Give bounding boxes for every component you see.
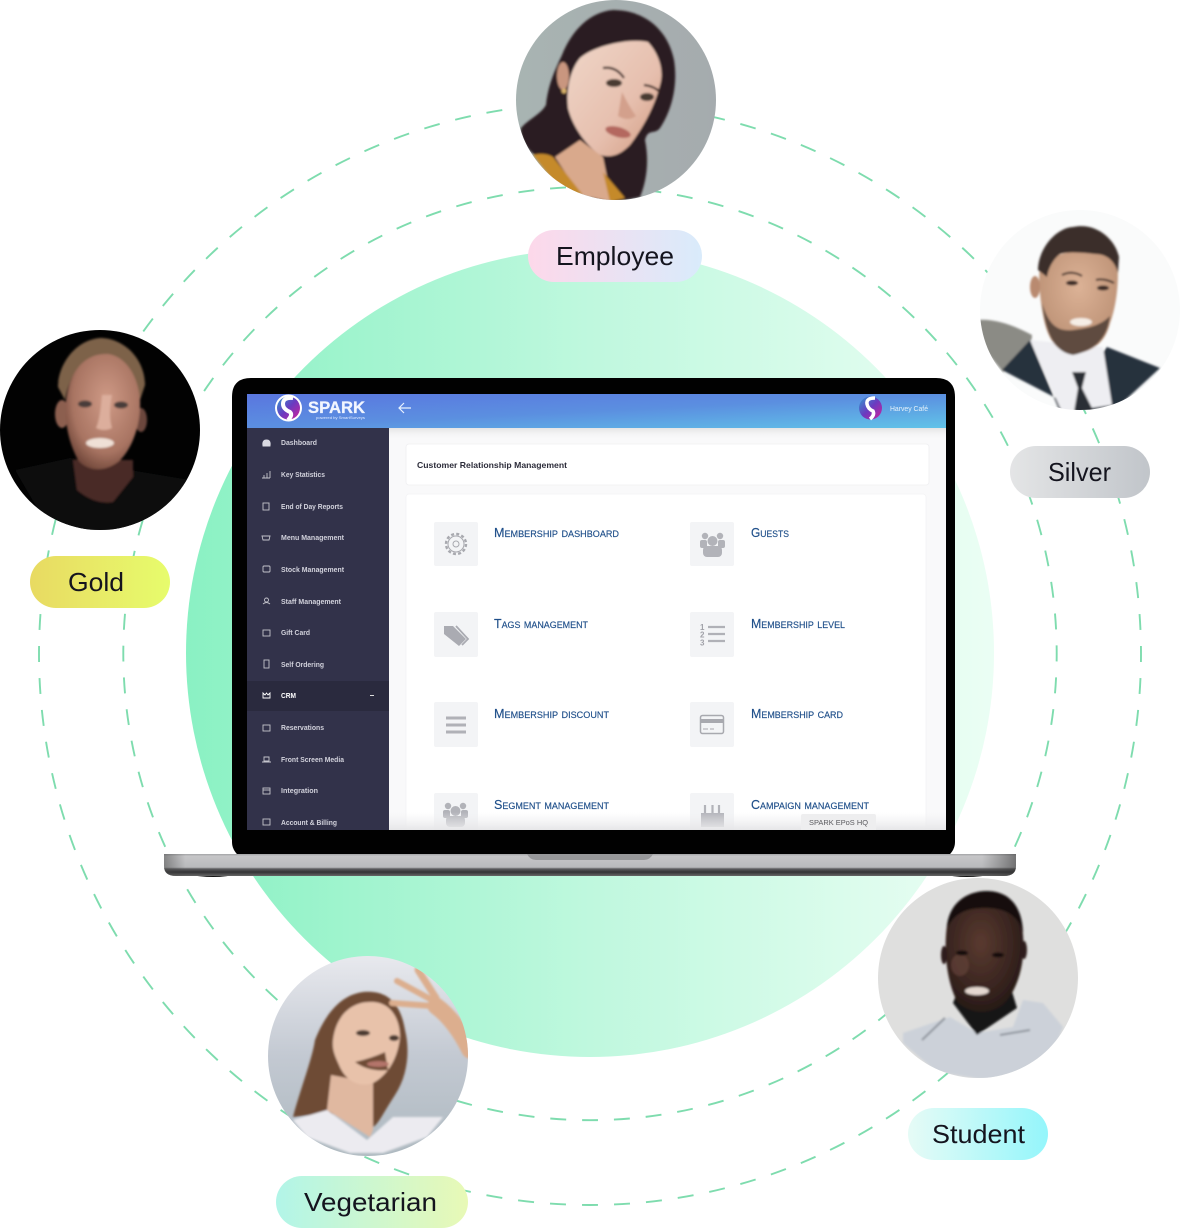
menu: account and billing bbox=[263, 819, 337, 827]
tooltip chip bbox=[801, 814, 876, 834]
module: tags management: Tags management bbox=[494, 617, 588, 631]
header shadow bbox=[389, 428, 946, 432]
menu: menu management: Menu Management bbox=[281, 535, 345, 542]
menu: crm bbox=[263, 693, 374, 700]
module: segment management: Segment management bbox=[494, 798, 609, 812]
inner dashed ring bbox=[123, 187, 1057, 1120]
laptop base bbox=[164, 854, 1016, 876]
module: membership discount: Membership discount bbox=[494, 707, 609, 721]
module: tags management bbox=[434, 612, 588, 657]
modules card bbox=[443, 528, 869, 827]
module: campaign management bbox=[690, 793, 869, 827]
menu: front screen media bbox=[262, 756, 344, 762]
menu: end of day reports: End of Day Reports bbox=[281, 504, 343, 511]
module: membership level: Membership level bbox=[751, 617, 845, 631]
menu: crm: CRM bbox=[281, 693, 296, 700]
menu: integration bbox=[263, 788, 318, 795]
module: campaign management: Campaign management bbox=[751, 798, 870, 812]
laptop bezel bbox=[232, 378, 955, 856]
pill: employee bbox=[528, 230, 702, 282]
pill: vegetarian bbox=[276, 1176, 468, 1228]
portrait: employee bbox=[516, 0, 716, 205]
menu: staff management bbox=[263, 598, 342, 606]
icon: back arrow bbox=[399, 403, 411, 413]
bottom fade bbox=[389, 812, 946, 830]
account logo bbox=[859, 396, 882, 420]
menu: dashboard bbox=[263, 440, 317, 447]
menu: self ordering bbox=[264, 660, 324, 669]
pill: silver: Silver bbox=[1048, 457, 1111, 487]
module: membership card: Membership card bbox=[751, 707, 843, 721]
menu: key statistics bbox=[262, 471, 325, 479]
pill: gold: Gold bbox=[68, 567, 124, 597]
laptop feet bbox=[185, 874, 995, 877]
brand name: SPARK bbox=[308, 398, 366, 417]
module: membership level: 2 bbox=[700, 630, 705, 640]
module: guests: Guests bbox=[751, 526, 789, 540]
menu: stock management: Stock Management bbox=[281, 567, 345, 574]
menu: stock management bbox=[263, 566, 345, 574]
module: membership dashboard bbox=[434, 522, 619, 566]
account name: Harvey Café bbox=[890, 406, 928, 413]
menu: end of day reports bbox=[263, 503, 343, 511]
portrait: vegetarian bbox=[268, 956, 470, 1156]
module: membership level bbox=[690, 612, 845, 657]
laptop screen bbox=[247, 394, 946, 838]
pill: gold bbox=[30, 556, 170, 608]
pill: employee: Employee bbox=[556, 241, 674, 271]
laptop notch bbox=[527, 854, 653, 860]
brand strapline: powered by SmartSurveys bbox=[316, 416, 365, 420]
portrait: gold bbox=[0, 330, 200, 530]
pill: vegetarian: Vegetarian bbox=[304, 1187, 437, 1217]
menu: front screen media: Front Screen Media bbox=[281, 757, 344, 764]
module: guests bbox=[690, 522, 789, 566]
page title card bbox=[406, 444, 929, 485]
menu: gift card: Gift Card bbox=[281, 630, 310, 637]
green background disc bbox=[186, 249, 994, 1057]
menu: reservations bbox=[263, 725, 324, 732]
active menu band bbox=[247, 681, 389, 711]
menu: integration: Integration bbox=[281, 788, 318, 795]
pill: student: Student bbox=[932, 1119, 1026, 1149]
header bar bbox=[247, 394, 946, 428]
portrait: silver bbox=[980, 224, 1162, 410]
pill: silver bbox=[1010, 446, 1150, 498]
module: membership dashboard: Membership dashboard bbox=[494, 526, 619, 540]
pill: student bbox=[908, 1108, 1048, 1160]
module: membership level: 3 bbox=[700, 638, 705, 648]
menu: gift card bbox=[263, 630, 310, 637]
menu: reservations: Reservations bbox=[281, 725, 324, 732]
portrait: student bbox=[878, 878, 1078, 1080]
page title card: Customer Relationship Management bbox=[417, 460, 567, 470]
sidebar bbox=[247, 428, 389, 830]
laptop bbox=[164, 378, 1016, 877]
menu: key statistics: Key Statistics bbox=[281, 472, 325, 479]
spark logo bbox=[275, 394, 302, 422]
tooltip chip: SPARK EPoS HQ bbox=[809, 818, 868, 827]
module: membership card bbox=[690, 702, 843, 747]
menu: self ordering: Self Ordering bbox=[281, 662, 324, 669]
menu: staff management: Staff Management bbox=[281, 599, 342, 606]
menu: dashboard: Dashboard bbox=[281, 440, 317, 447]
module: membership discount bbox=[434, 702, 609, 747]
module: segment management bbox=[434, 793, 609, 827]
module: membership level: 1 bbox=[700, 623, 705, 632]
menu: account and billing: Account & Billing bbox=[281, 820, 337, 827]
